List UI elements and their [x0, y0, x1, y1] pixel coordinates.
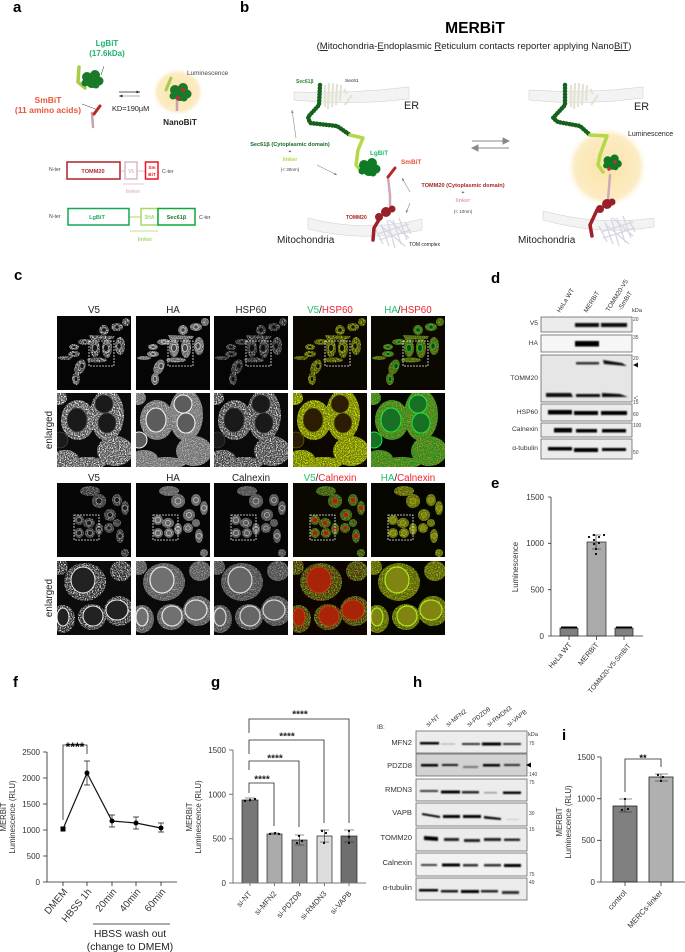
x labels: si-NT	[235, 889, 254, 909]
column headings top: V5	[88, 305, 101, 316]
x labels: TOMM20-V5-SmBiT	[587, 642, 633, 695]
x labels	[235, 889, 353, 921]
image: HA enlarged 2	[136, 561, 210, 635]
membrane: mitochondria left	[308, 218, 422, 236]
arrows: equilibrium	[119, 92, 140, 96]
membrane: ER right	[529, 87, 643, 103]
significance brackets: ****	[292, 710, 308, 720]
y tick labels: 1500	[526, 493, 545, 502]
construct: TOMM20-V5-SmBiT: BiT	[148, 172, 156, 177]
construct: TOMM20-V5-SmBiT: N-ter	[49, 167, 61, 173]
column headings top	[88, 305, 432, 316]
panel h: western blot	[377, 705, 539, 900]
lane labels: si-NT	[425, 714, 441, 729]
glow: NanoBiT luminescence	[152, 68, 204, 116]
panel label d: d	[491, 270, 500, 287]
protein: TOM complex	[599, 216, 635, 246]
column headings bottom: V5/Calnexin	[304, 473, 356, 484]
callout: TOMM20 cytoplasmic domain: +	[462, 190, 465, 196]
significance brackets: ****	[254, 774, 270, 786]
y axis title	[0, 780, 17, 854]
column headings top: HSP60	[235, 305, 267, 316]
callout: TOMM20 cytoplasmic domain: (< 10nm)	[454, 209, 473, 214]
construct: TOMM20-V5-SmBiT: V5	[128, 169, 134, 175]
x labels: si-MFN2	[253, 889, 278, 917]
image: V5/Calnexin enlarged	[293, 561, 367, 635]
blot: TOMM20	[510, 355, 639, 406]
significance bracket	[625, 752, 661, 792]
text: IB: IB:	[377, 724, 385, 731]
panel e: luminescence bar chart	[511, 493, 643, 695]
lane labels: si-VAPB	[506, 709, 529, 729]
image: HA/HSP60 overview	[371, 316, 445, 390]
protein: Sec61b linker LgBiT chain	[308, 85, 380, 176]
y axis title: Luminescence (RLU)	[8, 780, 17, 854]
blot: RMDN3	[385, 779, 535, 801]
blot: alpha-tubulin: α-tubulin	[383, 883, 412, 892]
y tick labels: 2500	[22, 748, 41, 757]
blot: PDZD8	[387, 754, 538, 778]
blot: HSP60	[517, 404, 639, 421]
panel label i: i	[562, 727, 566, 744]
text: NanoBiT: NanoBiT	[163, 118, 197, 127]
construct: TOMM20-V5-SmBiT	[49, 162, 174, 195]
x labels	[606, 888, 665, 930]
lane labels: -SmBiT	[617, 290, 634, 312]
label: LgBiT: LgBiT	[370, 150, 388, 157]
text: kDa: kDa	[528, 732, 539, 738]
callout: TOMM20 cytoplasmic domain	[421, 183, 505, 214]
blot: alpha-tubulin	[383, 878, 535, 900]
lane labels: si-RMDN3	[486, 705, 514, 729]
blot: TOMM20: 15	[633, 400, 639, 406]
data points and error bars	[244, 798, 354, 845]
y axis title: Luminescence (RLU)	[194, 780, 203, 854]
image: HA/Calnexin enlarged	[371, 561, 445, 635]
text: SmBiT label: SmBiT	[35, 95, 61, 105]
image: V5 overview 2	[57, 483, 131, 557]
blot: TOMM20: TOMM20	[510, 375, 538, 382]
data line	[60, 761, 164, 832]
x labels: si-VAPB	[328, 889, 353, 916]
column headings bottom: HA/Calnexin	[381, 473, 435, 484]
blot: RMDN3: 75	[529, 780, 535, 786]
y tick labels: 2000	[22, 774, 41, 783]
blot: VAPB: 30	[529, 811, 535, 817]
x labels: 60min	[143, 887, 168, 914]
callout: Sec61b cytoplasmic domain: Sec61β (Cytoplasmic domain)	[250, 142, 330, 148]
image: HA/Calnexin overview	[371, 483, 445, 557]
image: HSP60 enlarged	[214, 393, 288, 467]
wash out annotation: HBSS wash out	[94, 929, 166, 940]
blot: Calnexin: Calnexin	[382, 858, 412, 867]
data points and error bars	[619, 774, 668, 812]
x labels	[43, 887, 168, 925]
y tick labels: 0	[222, 879, 227, 888]
y tick labels: 0	[591, 878, 596, 887]
y tick labels: 500	[531, 586, 545, 594]
label: enlarged: enlarged	[44, 411, 55, 449]
blot: Calnexin: 75	[529, 872, 535, 878]
image: V5 enlarged 2	[57, 561, 131, 635]
x labels: HeLa WT	[547, 640, 574, 670]
column headings top: HA	[166, 305, 180, 316]
label: Sec61b: Sec61β	[296, 79, 314, 85]
image: HA overview	[136, 316, 210, 390]
y tick labels	[22, 748, 41, 887]
protein: MERBiT closed assembly	[553, 85, 622, 236]
blot: TOMM20	[380, 827, 535, 851]
construct: TOMM20-V5-SmBiT: Sm	[148, 165, 156, 170]
image: V5 overview	[57, 316, 131, 390]
construct: LgBiT-3HA-Sec61b: N-ter	[49, 214, 61, 220]
panel g: knockdown bar chart	[185, 710, 366, 921]
image: Calnexin overview	[214, 483, 288, 557]
blot: Calnexin	[512, 423, 642, 437]
callout: Sec61b cytoplasmic domain: +	[289, 149, 292, 155]
x labels: MERCs-linker	[626, 888, 665, 930]
text: dissociation constant: KD=190µM	[112, 104, 149, 113]
label: Luminescence: Luminescence	[628, 131, 673, 138]
blot: V5: 20	[633, 317, 639, 323]
protein: LgBiT	[78, 66, 104, 88]
panel d: western blot	[510, 278, 643, 459]
bars	[560, 542, 633, 636]
column headings bottom: HA	[166, 473, 180, 484]
image: HA/HSP60 enlarged	[371, 393, 445, 467]
lane labels: HeLa WT	[556, 287, 576, 314]
text: SmBiT label: (11 amino acids)	[15, 105, 81, 115]
panel label c: c	[14, 267, 22, 284]
blot: TOMM20: 15	[529, 827, 535, 833]
blot: HA: HA	[529, 340, 539, 347]
y axis title: MERBiT	[185, 802, 194, 832]
blot: PDZD8: 140	[529, 772, 538, 778]
x labels: MERBiT	[576, 640, 601, 667]
panel a: NanoBiT schematic	[15, 39, 229, 243]
panel label h: h	[413, 674, 422, 691]
panel label g: g	[211, 674, 220, 691]
bars	[242, 800, 357, 883]
y tick labels: 1000	[577, 794, 596, 804]
text: kDa: kDa	[632, 308, 643, 314]
y axis title	[185, 780, 203, 854]
callout: Sec61b cytoplasmic domain: (< 30nm)	[281, 167, 300, 172]
significance bracket: **	[639, 752, 647, 763]
blot: RMDN3: RMDN3	[385, 785, 412, 794]
significance brackets: ****	[279, 732, 295, 742]
protein: TOMM20 linker SmBiT chain	[373, 168, 396, 240]
construct: LgBiT-3HA-Sec61b: LgBiT	[89, 215, 105, 221]
y tick labels: 1500	[577, 753, 596, 762]
callout: Sec61b cytoplasmic domain	[250, 142, 330, 172]
image: HSP60 overview	[214, 316, 288, 390]
blot: MFN2: MFN2	[391, 738, 412, 747]
blot: HSP60: 60	[633, 412, 639, 418]
callout: Sec61b cytoplasmic domain: linker	[283, 157, 298, 163]
lane labels: TOMM20-V5	[605, 278, 630, 313]
construct: TOMM20-V5-SmBiT: TOMM20	[81, 169, 105, 175]
blot: V5: V5	[530, 320, 538, 327]
subtitle: (Mitochondria-Endoplasmic Reticulum contacts reporter applying NanoBiT)	[317, 41, 631, 52]
construct: LgBiT-3HA-Sec61b: 3HA	[144, 215, 155, 221]
construct: LgBiT-3HA-Sec61b	[49, 208, 211, 243]
y axis title: Luminescence (RLU)	[564, 785, 573, 859]
blot: VAPB: VAPB	[392, 808, 412, 817]
protein: TOM complex	[375, 218, 411, 248]
x labels: si-PDZD8	[275, 889, 303, 920]
blot: alpha-tubulin	[512, 439, 639, 459]
panel f: time course line chart	[0, 740, 177, 952]
y tick labels	[526, 493, 545, 641]
blot: Calnexin: 100	[633, 423, 642, 429]
blot: HSP60: HSP60	[517, 409, 538, 416]
arrows: equilibrium between states	[472, 138, 509, 151]
image: Calnexin enlarged	[214, 561, 288, 635]
label: ER: ER	[634, 101, 649, 113]
axes	[229, 750, 366, 886]
image: V5/HSP60 enlarged	[293, 393, 367, 467]
label: TOM complex: TOM complex	[409, 242, 441, 248]
membrane: mitochondria right	[543, 211, 654, 230]
arrow: to SmBiT	[402, 178, 410, 192]
construct: TOMM20-V5-SmBiT: linker	[126, 189, 141, 195]
blot: MFN2: 75	[529, 741, 535, 747]
x labels: DMEM	[43, 887, 70, 917]
significance bracket: ****	[66, 740, 85, 754]
y tick labels: 500	[213, 835, 227, 844]
text: luminescence: Luminescence	[187, 70, 229, 77]
arrow: to ER	[292, 110, 296, 138]
lane labels	[425, 705, 529, 729]
x labels	[547, 640, 633, 695]
lane labels: MERBiT	[583, 290, 601, 314]
column headings bottom: V5	[88, 473, 101, 484]
blot: HA: 35	[633, 335, 639, 341]
column headings bottom: Calnexin	[232, 473, 270, 484]
panel label f: f	[13, 674, 19, 691]
panel b right: closed state diagram	[518, 83, 673, 246]
column headings top: V5/HSP60	[307, 305, 353, 316]
construct: TOMM20-V5-SmBiT: C-ter	[162, 169, 174, 175]
axes	[548, 497, 643, 640]
title: MERBiT: MERBiT	[445, 20, 505, 37]
x labels: 40min	[118, 887, 143, 914]
text: LgBiT label: (17.6kDa)	[89, 49, 125, 58]
panel c: immunofluorescence grid	[44, 305, 448, 635]
arrow: to LgBiT	[317, 165, 337, 175]
blot: TOMM20: 20	[633, 356, 639, 362]
x labels: 20min	[94, 887, 119, 914]
panel i: bar chart	[555, 752, 685, 930]
image: V5/Calnexin overview	[293, 483, 367, 557]
blot: V5	[530, 317, 639, 332]
protein: SmBiT	[82, 104, 100, 127]
image: V5 enlarged	[57, 393, 131, 467]
glow: luminescence	[566, 126, 648, 208]
blot: VAPB	[392, 803, 535, 826]
y tick labels: 1000	[22, 826, 41, 835]
label: enlarged: enlarged	[44, 579, 55, 617]
y tick labels: 500	[27, 852, 41, 861]
y axis title: MERBiT	[555, 807, 564, 837]
image: V5/HSP60 overview	[293, 316, 367, 390]
significance brackets	[249, 710, 349, 827]
data points and error bars	[561, 534, 632, 628]
label: Sec61: Sec61	[345, 78, 359, 84]
y axis title: Luminescence	[511, 542, 520, 592]
lane labels: si-MFN2	[445, 708, 469, 729]
blot: HA	[529, 335, 639, 352]
text: LgBiT label: LgBiT	[96, 39, 118, 48]
blot: PDZD8: PDZD8	[387, 761, 412, 770]
label: TOMM20: TOMM20	[346, 215, 367, 221]
construct: LgBiT-3HA-Sec61b: linker	[138, 237, 153, 243]
construct: LgBiT-3HA-Sec61b: Sec61β	[167, 215, 187, 221]
axes	[43, 752, 177, 886]
wash out annotation	[87, 924, 173, 952]
lane labels: si-PDZD8	[466, 706, 492, 729]
label: SmBiT: SmBiT	[401, 159, 421, 166]
blot: Calnexin: Calnexin	[512, 426, 538, 433]
blot: MFN2	[391, 731, 535, 753]
arrow: to mitochondria	[406, 203, 410, 213]
image: HA enlarged	[136, 393, 210, 467]
blot: alpha-tubulin: 50	[633, 450, 639, 456]
y axis title	[555, 785, 573, 859]
y tick labels: 0	[36, 878, 41, 887]
x labels: si-RMDN3	[298, 889, 328, 921]
y tick labels: 0	[540, 632, 545, 641]
y tick labels	[577, 753, 596, 887]
axes	[597, 757, 685, 886]
x labels: HBSS 1h	[60, 887, 94, 925]
y tick labels: 1000	[526, 539, 545, 548]
y tick labels: 1500	[22, 800, 41, 809]
protein: Sec61 channel	[325, 83, 352, 109]
lane labels	[556, 278, 634, 314]
panel b left: open state diagram	[250, 78, 505, 248]
blot: alpha-tubulin: α-tubulin	[512, 445, 538, 452]
column headings bottom	[88, 473, 435, 484]
column headings top: HA/HSP60	[384, 305, 432, 316]
label: ER: ER	[404, 100, 419, 112]
blot: alpha-tubulin: 49	[529, 880, 535, 886]
callout: TOMM20 cytoplasmic domain: TOMM20 (Cytoplasmic domain)	[421, 183, 505, 189]
construct: LgBiT-3HA-Sec61b: C-ter	[199, 215, 211, 221]
membrane: ER left	[294, 87, 409, 103]
panel label e: e	[491, 475, 499, 492]
y tick labels: 500	[582, 836, 596, 845]
bars	[613, 777, 673, 882]
y tick labels	[208, 746, 227, 888]
label: Mitochondria: Mitochondria	[518, 235, 576, 246]
y tick labels: 1500	[208, 746, 227, 755]
callout: TOMM20 cytoplasmic domain: linker	[456, 198, 471, 204]
blot: Calnexin	[382, 853, 535, 878]
protein: NanoBiT complex	[166, 78, 192, 111]
blot: TOMM20: TOMM20	[380, 833, 412, 842]
image: HA overview 2	[136, 483, 210, 557]
significance bracket	[63, 740, 87, 820]
y tick labels: 1000	[208, 790, 227, 799]
significance brackets: ****	[267, 754, 283, 764]
protein: Sec61 channel	[571, 83, 598, 109]
label: Mitochondria: Mitochondria	[277, 235, 335, 246]
x labels: control	[606, 888, 629, 912]
